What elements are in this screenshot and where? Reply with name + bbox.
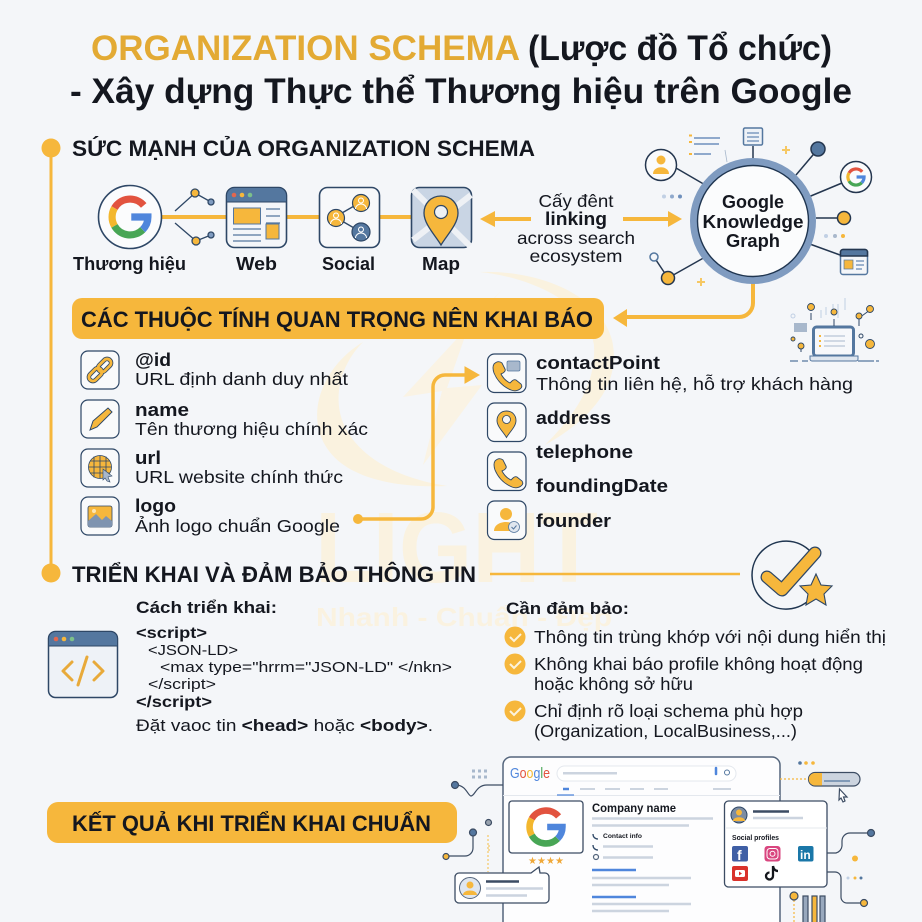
- text block: requirements: Cần đảm bảo:: [506, 599, 629, 618]
- text block: how to deploy: <JSON-LD>: [148, 642, 238, 659]
- property: name: name: [135, 400, 189, 420]
- text block: requirements: Chỉ định rõ loại schema phù hợp: [534, 701, 803, 721]
- review bubble: [455, 867, 549, 903]
- entity labels: [73, 254, 460, 274]
- property: @id: [81, 350, 348, 389]
- icon: person satellite: [646, 150, 676, 180]
- property: url: [81, 448, 343, 487]
- decorative dots and sparkles: [662, 136, 845, 286]
- property: @id: @id: [135, 350, 171, 370]
- property: founder: founder: [536, 510, 611, 531]
- text block: how to deploy: [136, 599, 452, 735]
- property: logo: [81, 496, 340, 536]
- text block: requirements: Thông tin trùng khớp với nội dung hiển thị: [534, 627, 886, 647]
- google knowledge graph hub: Graph: [726, 230, 780, 251]
- property: foundingDate: foundingDate: [536, 475, 668, 496]
- icon: gold node lower: [662, 272, 674, 284]
- heading pill: key properties: CÁC THUỘC TÍNH QUAN TRỌNG NÊN KHAI BÁO: [81, 307, 593, 332]
- company logo card: [509, 801, 583, 853]
- entity labels: Web: [236, 254, 277, 274]
- icon: white node: [650, 253, 658, 261]
- property: name: Tên thương hiệu chính xác: [135, 419, 368, 439]
- title: - Xây dựng Thực thể Thương hiệu trên Google: [70, 72, 852, 111]
- entity labels: Map: [422, 254, 460, 274]
- linking caption: ecosystem: [530, 246, 622, 266]
- linking caption: across search: [517, 228, 635, 248]
- search bar: [557, 766, 736, 781]
- icon: linkedin: in: [800, 848, 811, 862]
- arrow: knowledge graph to properties: [613, 280, 753, 327]
- icon: facebook: f: [737, 847, 742, 863]
- knowledge graph satellites: [646, 128, 872, 284]
- arrow: logo to contactPoint: [353, 367, 479, 524]
- google knowledge graph hub: Google: [722, 191, 784, 212]
- icon: mini search pill: [808, 772, 860, 786]
- icon: laptop network: [790, 298, 879, 361]
- icon: youtube: [732, 866, 748, 881]
- heading: deployment: TRIỂN KHAI VÀ ĐẢM BẢO THÔNG TIN: [72, 562, 476, 587]
- entity labels: Social: [322, 254, 375, 274]
- property: telephone: [488, 441, 633, 490]
- icon: document satellite: [744, 128, 762, 145]
- icon: social: [320, 188, 380, 248]
- social profiles card: Social profiles: [732, 835, 779, 842]
- property: contactPoint: Thông tin liên hệ, hỗ trợ khách hàng: [536, 373, 853, 394]
- title: [70, 29, 852, 111]
- heading pill: results: [47, 802, 457, 843]
- icon: web browser: [226, 188, 286, 248]
- heading pill: results: KẾT QUẢ KHI TRIỂN KHAI CHUẨN: [72, 811, 431, 836]
- company name: Company name: [592, 803, 676, 815]
- heading: power of organization schema: SỨC MẠNH CỦA ORGANIZATION SCHEMA: [72, 136, 535, 161]
- google knowledge graph hub: [694, 162, 812, 280]
- heading pill: key properties: [72, 298, 604, 339]
- linking caption: linking: [545, 209, 607, 229]
- property: contactPoint: contactPoint: [536, 352, 660, 373]
- property: name: [81, 400, 368, 439]
- text block: how to deploy: Cách triển khai:: [136, 599, 277, 617]
- google results browser: [503, 757, 780, 922]
- icon: G satellite: [840, 162, 872, 192]
- text block: how to deploy: Đặt vaoc tin <head> hoặc <body> .: [136, 716, 433, 735]
- linking caption: Cấy đênt: [538, 191, 614, 211]
- icon: cursor: [839, 789, 847, 802]
- property: address: [488, 403, 611, 442]
- watermark: LIGHT logo: [315, 272, 614, 632]
- icon: gold node: [838, 212, 850, 224]
- text block: requirements: hoặc không sở hữu: [534, 674, 693, 694]
- network decorations: right: [780, 761, 874, 922]
- icon: code window: [48, 632, 118, 698]
- linking caption: [517, 191, 635, 266]
- title: (Lược đồ Tổ chức): [528, 29, 832, 68]
- text block: how to deploy: <script>: [136, 625, 207, 642]
- icon: list satellite: [694, 138, 720, 154]
- google wordmark: Google: [510, 765, 550, 782]
- entity connector line: [160, 215, 412, 219]
- property: founder: [488, 501, 611, 540]
- text block: how to deploy: </script>: [136, 694, 212, 711]
- property: logo: Ảnh logo chuẩn Google: [135, 515, 340, 536]
- entity labels: Thương hiệu: [73, 254, 186, 274]
- text block: requirements: (Organization, LocalBusiness,...): [534, 721, 797, 741]
- property: url: URL website chính thức: [135, 467, 343, 487]
- icon: browser satellite: [840, 250, 868, 274]
- mini bar chart: [803, 896, 825, 922]
- icon: check and star: [752, 541, 832, 609]
- watermark: LIGHT logo: Nhanh - Chuẩn - Đẹp: [316, 602, 612, 632]
- property: telephone: telephone: [536, 441, 633, 462]
- property: @id: URL định danh duy nhất: [135, 369, 348, 389]
- title: ORGANIZATION SCHEMA: [91, 29, 520, 68]
- google knowledge graph hub: Knowledge: [702, 211, 804, 232]
- result lines: [592, 818, 713, 911]
- text block: requirements: [504, 599, 886, 741]
- contact info: Contact info: [603, 833, 642, 840]
- property: address: address: [536, 407, 611, 428]
- icon: small connector nodes: [175, 189, 214, 245]
- rating stars: ★★★★: [528, 856, 564, 867]
- watermark: LIGHT logo: LIGHT: [315, 492, 598, 604]
- result tabs: [563, 788, 569, 790]
- text block: how to deploy: <max type="hrrm="JSON-LD" </nkn>: [160, 659, 452, 676]
- property: contactPoint: [488, 352, 853, 394]
- arrow: left: [480, 211, 531, 227]
- icon: brand G circle: [98, 186, 162, 248]
- property: logo: logo: [135, 496, 176, 516]
- text block: requirements: Không khai báo profile không hoạt động: [534, 654, 863, 674]
- network decorations: left: [443, 771, 503, 872]
- text block: how to deploy: </script>: [148, 676, 216, 693]
- icon: blue node: [811, 142, 825, 156]
- arrow: right: [623, 211, 682, 227]
- icon: tiktok: [766, 866, 778, 880]
- timeline: [42, 138, 60, 582]
- heading rule: [490, 573, 740, 575]
- icon: map: [412, 188, 472, 248]
- property: url: url: [135, 448, 161, 468]
- icon: instagram: [764, 846, 780, 862]
- social profiles card: [724, 801, 827, 887]
